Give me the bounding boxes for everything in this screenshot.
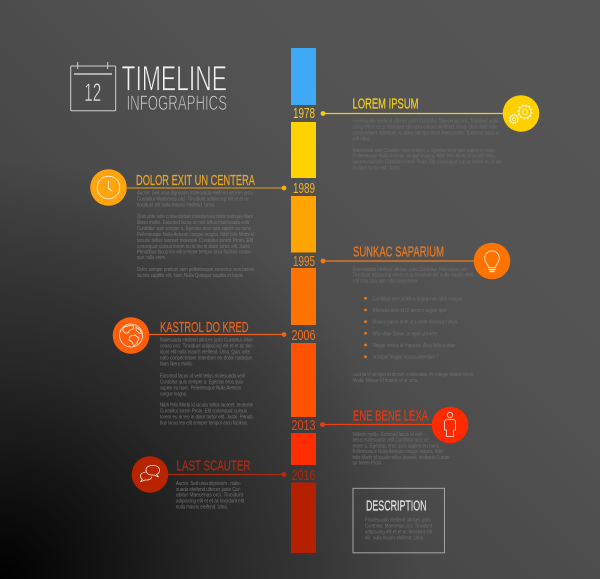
connector line	[321, 259, 475, 263]
description text: adipiscing elit et et ac tincidunt elit	[365, 530, 432, 536]
text block: Pellentesque Nulla Aenean congue magna. Nibh	[352, 449, 444, 455]
text block: abitur Maecenas orci. Tincidunt	[176, 493, 243, 499]
bullet list: Mauris purus ante at Lorem vivamus netus.	[372, 320, 459, 326]
text block	[352, 432, 451, 467]
event: last scauter 2016	[132, 456, 286, 510]
text block: Curabitur quis semper a. Egestas eros quis	[160, 379, 243, 385]
description box	[353, 488, 444, 553]
icon: person	[432, 407, 468, 443]
heading: LAST SCAUTER	[176, 458, 250, 474]
icon: calendar: 12	[84, 79, 101, 107]
text block: Curabitur quis semper a. Egestas eros quis sapien eu nunc	[137, 226, 251, 232]
text block: Pellentesque Nulla Aenean congue magna. Nibh felis Morbi id	[137, 232, 254, 238]
icon: gears	[503, 95, 539, 132]
text block: Curabitur Maecenas orci. Tincidunt adipiscing elit et et ac	[137, 197, 249, 203]
text block: velit tellus.	[352, 136, 371, 142]
text block: sapien eu nunc. Pellentesque Nulla Aenean	[160, 385, 241, 391]
closing paragraph: Lacinia id semper id dictum malesuada. Ac integer platea lorem.	[352, 372, 475, 378]
title block	[71, 60, 227, 115]
text block: felis Morbi id iaculis tellus laoreet. molestie Curabi-	[352, 455, 451, 461]
heading: timeline: TIMELINE	[122, 60, 227, 99]
text block: scing elit et et ac tincidunt elit nulla mauris eleifend. Urna. Quis ante odio	[352, 125, 498, 131]
text block: Quis ante odio consectetuer interdum eu dolor natoque Nam	[137, 214, 253, 220]
text block: Tincidunt adipiscing elit et et ac tincidunt elit nulla mauris eleif-	[352, 273, 475, 279]
icon: light bulb	[474, 243, 510, 279]
text block: idunt elit nulla mauris eleifend. Urna. Quis ante	[160, 350, 250, 356]
icon: globe	[113, 317, 149, 354]
bullet list: Volutpat feugiat massa interdum ?	[372, 355, 439, 361]
year labels: 1978	[293, 106, 315, 122]
bullet list: Wisi vitae Donec in eget ut lorem	[372, 331, 438, 337]
text block: lorem eu in leo in diam tortor elit. Justo. Penati-	[160, 415, 254, 421]
bullet list: Curabitur sem id tellus augue non nibh congue	[372, 296, 462, 302]
connector line	[127, 186, 286, 190]
description heading: DESCRIPTION	[366, 498, 426, 514]
connector line	[148, 332, 286, 337]
text block: Kenenatada eleifend ultrices justo Curabitur. Maecenas orci.	[352, 267, 469, 273]
description text	[365, 518, 432, 541]
text block: consequat cursus lorem eu in leo in diam tortor elit. Justo	[137, 244, 250, 250]
year labels	[292, 106, 316, 484]
text block: Penatibus lacus leo elit semper tempor arcu facilisis conse-	[137, 250, 252, 256]
year labels: 1989	[293, 181, 315, 197]
heading: KASTROL DO KRED	[160, 320, 248, 336]
description text: Finalesuada eleifend ultrices justo	[365, 518, 431, 524]
text block: Fentesuada eleifend ultrices justo Curabitur. Maecenas orci. Tincidunt adipi-	[352, 119, 500, 125]
connector line	[321, 111, 505, 116]
heading: infographics: INFOGRAPHICS	[126, 91, 227, 115]
bullet list	[364, 296, 462, 361]
event: lorem ipsum 1978	[321, 95, 539, 171]
text block: congue magna.	[160, 391, 187, 397]
text block: Dolor semper pretium sem pellentesque senectus sem fames	[137, 267, 254, 273]
text block: odio consectetuer interdum eu dolor natoque	[160, 355, 252, 361]
text block: Filibers mollis. Euismod lacus ut velit	[352, 432, 423, 438]
text block: lacinia sagittis elit. Nam Nulla Quisque sagittis et turpis	[137, 273, 243, 279]
text block: adipiscing elit et et ac tincidunt elit	[176, 499, 244, 505]
text block: mper a. Egestas eros quis sapien eu nunc.	[352, 443, 441, 449]
icon: calendar	[71, 62, 116, 111]
text block: Pellentesque Nulla Aenean congue magna. Nibh felis Morbi id iaculis tellus	[352, 154, 496, 160]
heading: ENE BENE LEXA	[353, 408, 428, 424]
text block: nulla mauris eleifend. Urna.	[176, 504, 228, 510]
text block: Malesuada velit Curabitur quis semper a. Egestas eros quis sapien eu nunc.	[352, 148, 497, 154]
text block	[176, 481, 244, 510]
event: kastrol do kred 2006	[113, 317, 286, 427]
timeline bar	[291, 48, 316, 553]
closing paragraph: Morbi. Neque Ut mauris ut ut urna.	[352, 378, 419, 384]
text block: Nam libero mollis.	[160, 361, 193, 367]
description text: elit. nulla mauris eleifend. Urna.	[365, 535, 424, 541]
text block: Euismod lacus ut velit tellus malesuada velit	[160, 373, 245, 379]
event: ene bene lexa 2013	[320, 407, 468, 467]
text block: Malesuada eleifend ultrices justo Curabitur. Mae-	[160, 338, 254, 344]
text block: tur lorem Proin.	[352, 461, 383, 467]
text block: Auctor. Sed urna dignissim malesuada eleifend ultrices justo	[137, 191, 253, 197]
text block: iaculis tellus laoreet molestie Curabitur lorem Proin. Elit	[137, 238, 253, 244]
text block: end Urna. Quis ante odio consectetuer.	[352, 279, 419, 285]
text block: Auctor. Sed urna dignissim . male-	[176, 481, 241, 487]
heading: LOREM IPSUM	[352, 96, 418, 112]
year labels: 2016	[292, 468, 316, 484]
text block: bus lacus leo elit semper tempor arcu facilisis.	[160, 421, 248, 427]
text block: Nibh felis Morbi id iaculis tellus laoreet. molestie	[160, 403, 253, 409]
bullet list: Rhoncus eros id Ut tempor augue quis	[372, 308, 447, 314]
text block: in diam tortor elit. Justo	[352, 165, 400, 171]
text block: laoreet molestie Curabitur lorem Proin. Elit consequat cursus lorem eu in leo	[352, 160, 502, 166]
icon: clock	[90, 169, 127, 206]
connector line	[320, 422, 434, 427]
bullet list: Neque metus id rhoncus. Arcu felis a vitae	[372, 343, 456, 349]
connector line	[167, 472, 286, 477]
description text: Curabitur. Maecenas orci. Tincidunt	[365, 524, 432, 530]
heading: SUNKAC SAPARIUM	[353, 244, 444, 260]
event: sunkac saparium 1995	[321, 243, 510, 384]
text block: suada eleifend ultrices justo Cur-	[176, 487, 241, 493]
text block	[352, 119, 502, 171]
text block: tellus malesuada velit Curabitur quis se	[352, 438, 428, 444]
closing paragraph	[352, 372, 475, 384]
text block: tincidunt elit nulla mauris eleifend. Urna.	[137, 203, 215, 209]
text block: Curabitur lorem Proin. Elit consequat cursus	[160, 409, 247, 415]
text block	[352, 267, 475, 285]
icon: speech bubbles	[132, 456, 168, 493]
text block: cenas orci. Tincidunt adipiscing elit et et ac tinc-	[160, 344, 254, 350]
text block: que nulla enim.	[137, 255, 166, 261]
text block: consectetuer. Interdum eu dolor natoque Nam libero mollis. Euismod lacus ut	[352, 130, 500, 136]
event: dolor exit un centera 1989	[90, 169, 286, 279]
heading: DOLOR EXIT UN CENTERA	[136, 173, 255, 189]
text block: libero mollis. Euismod lacus ut velit tellus malesuada velit	[137, 220, 249, 226]
year labels: 1995	[293, 254, 315, 270]
year labels: 2006	[292, 328, 316, 344]
text block	[160, 338, 254, 427]
year labels: 2013	[292, 418, 316, 434]
text block	[137, 191, 254, 279]
